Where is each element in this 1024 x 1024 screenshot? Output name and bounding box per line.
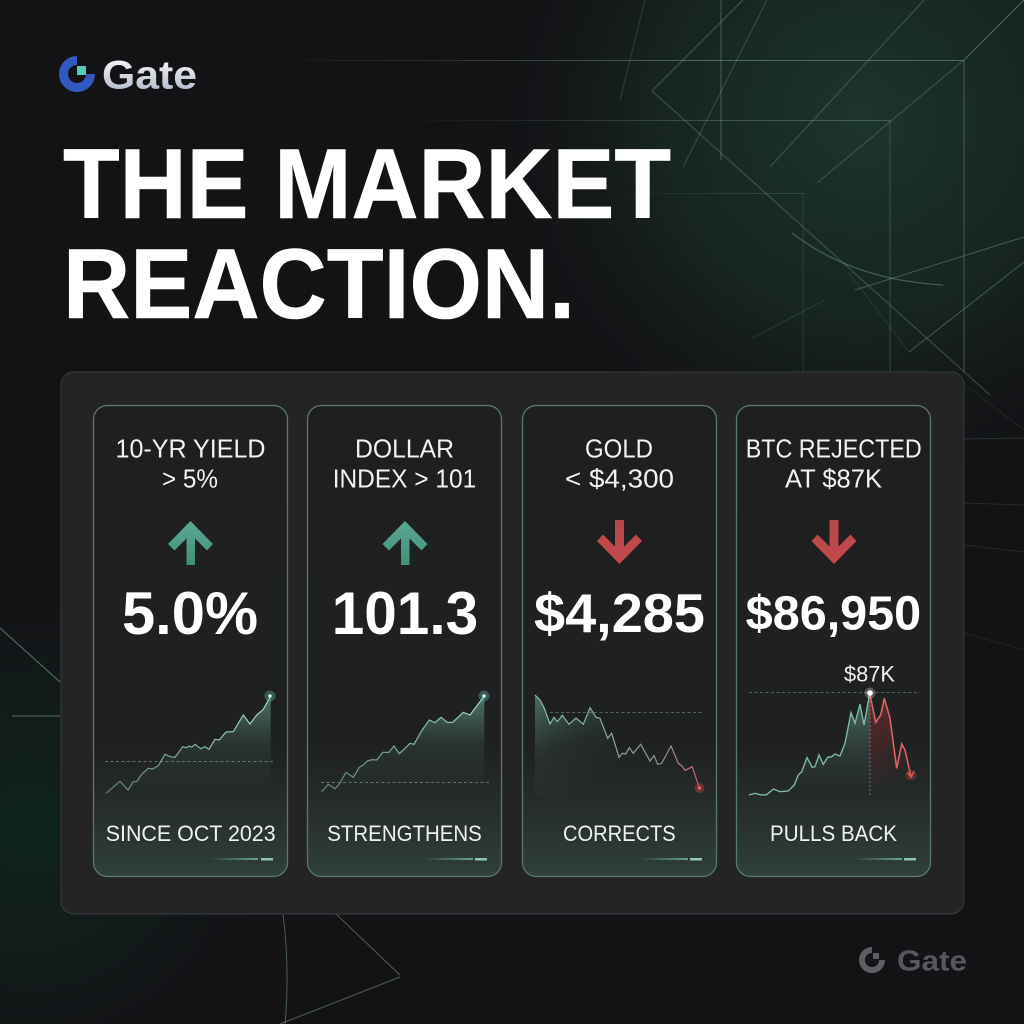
- watermark logo: [862, 946, 967, 978]
- heading: < $4,300: [565, 464, 674, 494]
- line chart: [535, 695, 704, 795]
- icon: up arrow: [168, 521, 213, 565]
- price tag: $87K: [844, 662, 895, 686]
- heading: AT $87K: [785, 464, 883, 494]
- heading: [333, 434, 476, 494]
- panel: market indicators: [61, 372, 964, 914]
- icon: down arrow: [597, 520, 642, 564]
- title: [63, 128, 671, 339]
- line chart: [105, 690, 276, 795]
- heading: INDEX > 101: [333, 464, 476, 494]
- value: 5.0%: [122, 580, 258, 647]
- card: 10-year yield: [94, 406, 288, 876]
- heading: [746, 434, 922, 494]
- line chart: [749, 688, 920, 797]
- icon: down arrow: [812, 520, 856, 564]
- card: dollar index: [308, 406, 502, 876]
- footer label: SINCE OCT 2023: [106, 821, 276, 846]
- heading: > 5%: [162, 464, 218, 494]
- footer label: STRENGTHENS: [327, 821, 482, 846]
- footer label: PULLS BACK: [770, 821, 897, 846]
- heading: BTC REJECTED: [746, 434, 922, 464]
- heading: DOLLAR: [355, 434, 454, 464]
- footer label: CORRECTS: [563, 821, 676, 846]
- logo: [64, 54, 197, 98]
- progress bar: [210, 858, 273, 860]
- line chart: [321, 690, 490, 795]
- watermark logo: Gate: [897, 946, 967, 978]
- heading: [565, 434, 674, 494]
- icon: up arrow: [382, 521, 428, 565]
- card: bitcoin: [736, 406, 930, 876]
- heading: [116, 434, 266, 494]
- heading: GOLD: [585, 434, 653, 464]
- logo: Gate: [102, 54, 197, 98]
- heading: 10-YR YIELD: [116, 434, 266, 464]
- title: REACTION.: [63, 228, 575, 339]
- value: $4,285: [534, 582, 705, 644]
- card: gold: [522, 406, 716, 876]
- value: 101.3: [332, 580, 478, 647]
- progress bar: [640, 858, 702, 860]
- progress bar: [854, 858, 916, 860]
- progress bar: [424, 858, 487, 860]
- value: $86,950: [746, 588, 921, 640]
- title: THE MARKET: [63, 128, 671, 239]
